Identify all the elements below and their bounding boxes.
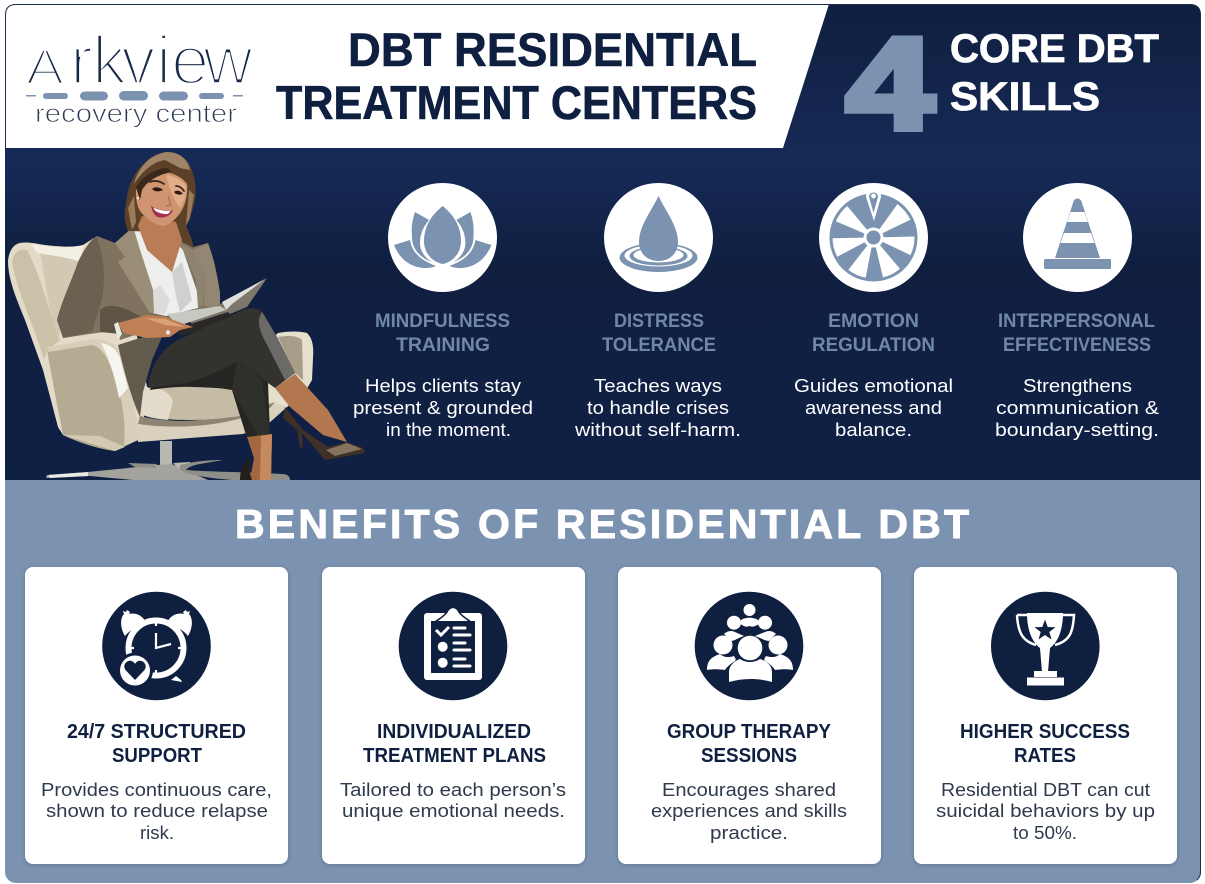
icon: wheel [819,183,928,292]
logo: Arkview recovery center: A [26,39,65,95]
seat shell and cushion [138,402,287,442]
panel: navy background [5,4,1201,481]
heading: EMOTION [828,311,919,332]
description: to 50%. [1013,823,1077,843]
title: TREATMENT CENTERS [276,76,757,129]
heading: DISTRESS [614,311,704,332]
heading: 24/7 STRUCTURED [67,721,246,743]
shirt cuff and hand [114,322,122,340]
chair back and side [8,236,148,451]
description [353,376,533,440]
description: risk. [140,823,174,843]
big number 4: 4 [846,10,934,156]
heading: INTERPERSONAL [998,311,1155,332]
heading: SUPPORT [112,745,202,767]
heading: MINDFULNESS [375,311,510,332]
tablet [190,278,267,330]
description: communication & [996,398,1159,418]
heading [375,311,510,356]
far lower leg and shoe [247,434,272,480]
heading [998,311,1155,356]
description: Teaches ways [594,376,722,396]
heading: TOLERANCE [602,335,716,356]
skill 1: mindfulness training [353,183,533,440]
heading: core DBT skills: CORE DBT [950,27,1159,71]
hair back [125,152,196,248]
logo: Arkview recovery center [26,22,253,128]
description [651,780,847,843]
heading: GROUP THERAPY [667,721,832,743]
card 1: structured support [25,567,288,864]
description [574,376,741,440]
description: Guides emotional [794,376,953,396]
heading: INDIVIDUALIZED [377,721,531,743]
heading: SESSIONS [701,745,797,767]
white shirt [133,227,200,316]
heading [812,311,935,356]
description: in the moment. [386,420,511,440]
description: to handle crises [587,398,729,418]
near shin [275,374,347,442]
title [276,23,757,129]
description: Encourages shared [662,780,836,800]
panel: white header [5,4,829,148]
near thigh trousers [148,308,295,388]
jacket and left sleeve [57,227,220,340]
icon: trophy [991,592,1100,700]
illustration: woman seated in armchair [8,152,365,480]
eyebrows and eyes [150,181,184,191]
description: practice. [710,823,788,843]
icon: lotus [388,183,497,292]
chair front arm panel [47,342,138,451]
heading: REGULATION [812,335,935,356]
description [936,780,1155,843]
smile [151,206,173,218]
heading: HIGHER SUCCESS [960,721,1130,743]
description: unique emotional needs. [342,801,565,821]
icon: alarm clock with heart [102,592,211,700]
chair base [46,441,290,480]
title: DBT RESIDENTIAL [348,23,757,76]
heading [602,311,716,356]
jacket lower flap [118,330,165,417]
near shoe [283,407,365,460]
icon: traffic cone [1023,183,1132,292]
icon: water drop [604,183,713,292]
heading: TRAINING [396,335,490,356]
heading: RATES [1014,745,1076,767]
description: balance. [835,420,912,440]
heading: core DBT skills: SKILLS [950,75,1100,119]
panel: benefits background [5,480,1201,883]
icon: group of people [695,592,803,700]
skill 2: distress tolerance [574,183,741,440]
heading [363,721,546,767]
neck [138,216,182,272]
heading: TREATMENT PLANS [363,745,546,767]
logo: Arkview recovery center: recovery center [35,98,237,128]
description [794,376,953,440]
chair right arm [262,332,313,418]
description: without self-harm. [574,420,741,440]
heading [960,721,1130,767]
description [41,780,272,843]
right lapel [180,243,205,308]
description: shown to reduce relapse [46,801,268,821]
description: Provides continuous care, [41,780,272,800]
face [136,172,187,226]
card 3: group therapy [618,567,881,864]
skill 4: interpersonal effectiveness [995,183,1159,440]
description: Residential DBT can cut [941,780,1150,800]
description [995,376,1159,440]
card 2: treatment plans [322,567,585,864]
heading: EFFECTIVENESS [1003,335,1151,356]
description: awareness and [805,398,942,418]
icon: clipboard [399,592,507,700]
description: experiences and skills [651,801,847,821]
card 4: success rates [914,567,1177,864]
description: Strengthens [1023,376,1132,396]
description: Tailored to each person’s [340,780,566,800]
description: Helps clients stay [365,376,521,396]
description: suicidal behaviors by up [936,801,1155,821]
description: present & grounded [353,398,533,418]
skill 3: emotion regulation [794,183,953,440]
logo: Arkview recovery center: rkview [70,22,253,99]
heading: benefits: BENEFITS OF RESIDENTIAL DBT [235,501,969,547]
left lapel [115,227,154,313]
far leg trousers [150,325,270,438]
heading [67,721,246,767]
description [340,780,566,821]
heading [667,721,832,767]
heading: core DBT skills [950,27,1159,119]
description: boundary-setting. [995,420,1159,440]
